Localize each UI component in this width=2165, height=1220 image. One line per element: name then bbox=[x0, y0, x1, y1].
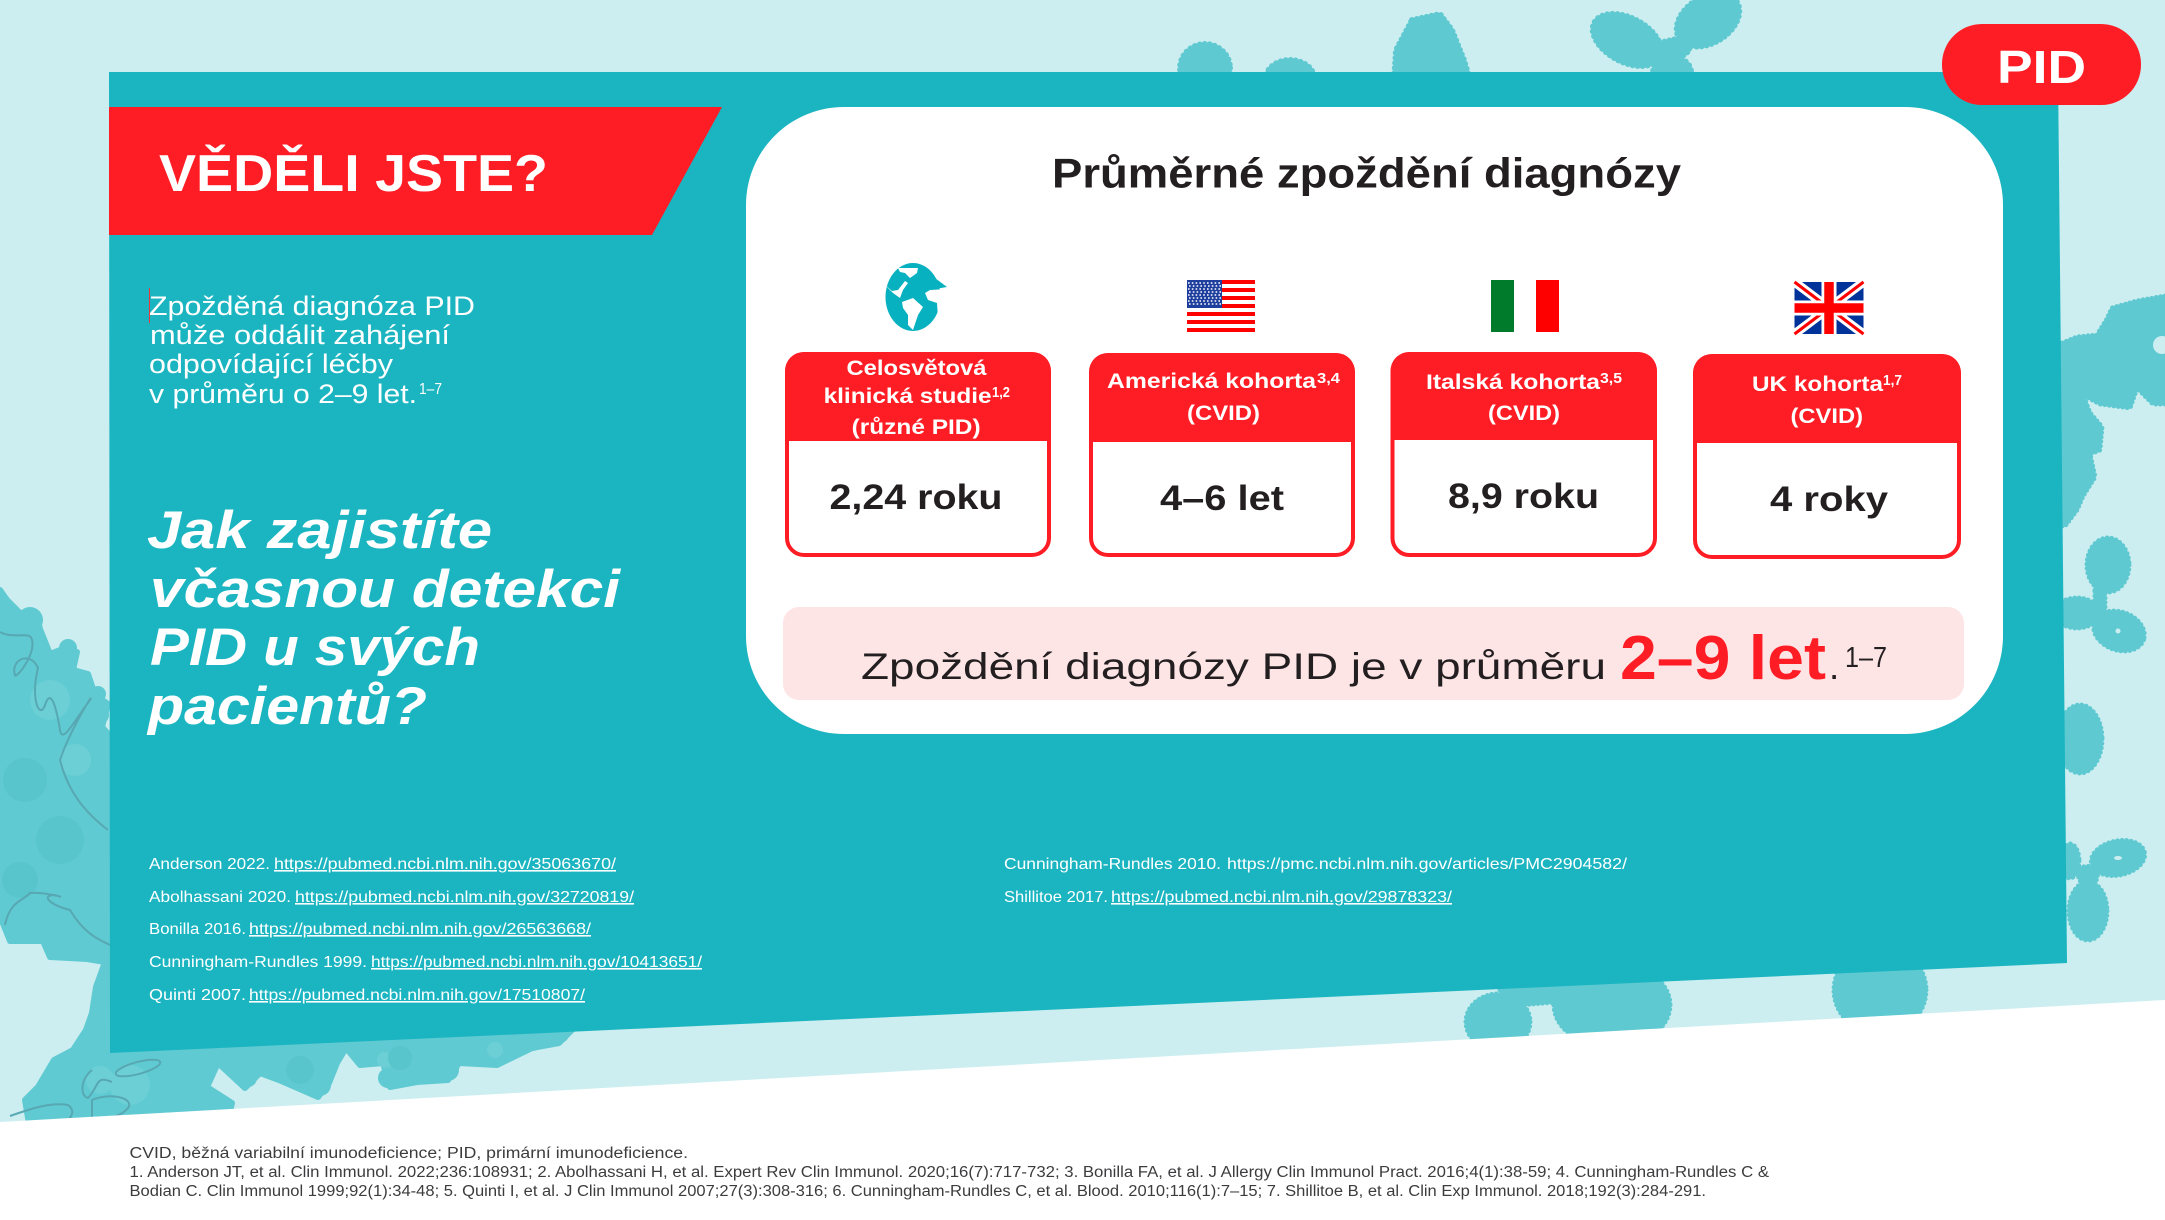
callout: average delay summary bbox=[783, 607, 1964, 700]
callout: average delay summary: 2–9 let bbox=[1620, 624, 1826, 693]
panel: average diagnostic delay card bbox=[746, 107, 2003, 734]
cohort card: USA: (CVID) bbox=[1187, 402, 1260, 425]
illustration: protein and antibodies along the right edge bbox=[2040, 296, 2165, 940]
illustration: protein clusters on the left edge bbox=[0, 590, 572, 1124]
cohort card: worldwide bbox=[785, 352, 1051, 555]
footnotes: Bodian C. Clin Immunol 1999;92(1):34-48; 5. Quinti I, et al. J Clin Immunol 2007;27(3):308-316; 6. Cunningham-Rundles C, et al. Blood. 2010;116(1):7–15; 7. Shillitoe B, et al. Clin Exp Immunol. 2018;192(3):284-291. bbox=[130, 1183, 1706, 1200]
footnotes bbox=[130, 1145, 1770, 1200]
reference links: right column: https://pubmed.ncbi.nlm.nih.gov/29878323/ bbox=[1111, 889, 1453, 906]
reference links: left column: https://pubmed.ncbi.nlm.nih.gov/35063670/ bbox=[274, 856, 617, 873]
text block: delayed diagnosis intro: Zpožděná diagnóza PID bbox=[149, 291, 475, 321]
reference links: left column: Cunningham-Rundles 1999. bbox=[149, 954, 367, 971]
cohort card: UK: UK kohorta bbox=[1752, 373, 1883, 396]
cohort card: UK: 1,7 bbox=[1883, 372, 1902, 389]
reference links: right column bbox=[1004, 856, 1628, 906]
cohort card: UK: (CVID) bbox=[1790, 405, 1863, 428]
cohort card: USA: 3,4 bbox=[1317, 370, 1341, 387]
reference links: right column: https://pmc.ncbi.nlm.nih.gov/articles/PMC2904582/ bbox=[1227, 856, 1628, 873]
illustration: antibodies along the top edge bbox=[1180, 0, 1749, 96]
cohort card: Italy: 3,5 bbox=[1600, 370, 1622, 387]
text block: delayed diagnosis intro: 1–7 bbox=[419, 381, 442, 398]
reference links: left column: https://pubmed.ncbi.nlm.nih.gov/32720819/ bbox=[295, 889, 635, 906]
reference links: left column: Quinti 2007. bbox=[149, 987, 246, 1004]
cohort card: UK bbox=[1693, 354, 1961, 557]
cohort card: Italy: Italská kohorta bbox=[1426, 371, 1600, 394]
question heading bbox=[146, 501, 621, 736]
badge: PID pill: PID bbox=[1997, 41, 2086, 93]
question heading: PID u svých bbox=[150, 618, 480, 677]
reference links: left column: Abolhassani 2020. bbox=[149, 889, 291, 906]
badge: PID pill bbox=[1942, 24, 2141, 105]
reference links: left column: https://pubmed.ncbi.nlm.nih.gov/10413651/ bbox=[371, 954, 703, 971]
reference links: right column: Cunningham-Rundles 2010. bbox=[1004, 856, 1221, 873]
reference links: right column: Shillitoe 2017. bbox=[1004, 889, 1108, 906]
question heading: pacientů? bbox=[146, 677, 427, 736]
text block: delayed diagnosis intro: v průměru o 2–9 let. bbox=[149, 379, 417, 409]
cohort card: Italy: 8,9 roku bbox=[1448, 477, 1599, 516]
cohort card: worldwide: 1,2 bbox=[992, 384, 1010, 401]
icon: US flag bbox=[1187, 280, 1255, 332]
illustration: antibodies along the bottom edge bbox=[1466, 946, 1926, 1050]
text block: delayed diagnosis intro bbox=[149, 288, 475, 409]
text block: delayed diagnosis intro: odpovídající léčby bbox=[149, 349, 394, 379]
reference links: left column: Anderson 2022. bbox=[149, 856, 270, 873]
reference links: left column bbox=[149, 856, 703, 1004]
cohort card: UK: 4 roky bbox=[1770, 480, 1889, 519]
text block: delayed diagnosis intro: může oddálit zahájení bbox=[150, 320, 451, 350]
reference links: left column: Bonilla 2016. bbox=[149, 921, 246, 938]
banner: did you know bbox=[109, 107, 722, 235]
cohort card: worldwide: Celosvětová bbox=[846, 357, 987, 380]
icon: globe bbox=[884, 263, 950, 335]
reference links: left column: https://pubmed.ncbi.nlm.nih.gov/17510807/ bbox=[249, 987, 586, 1004]
card heading: Průměrné zpoždění diagnózy bbox=[1052, 150, 1682, 196]
banner: did you know: VĚDĚLI JSTE? bbox=[159, 144, 548, 203]
footnotes: 1. Anderson JT, et al. Clin Immunol. 2022;236:108931; 2. Abolhassani H, et al. Expert Rev Clin Immunol. 2020;16(7):717-732; 3. Bonilla FA, et al. J Allergy Clin Immunol Pract. 2016;4(1):38-59; 4. Cunningham-Rundles C & bbox=[130, 1164, 1770, 1181]
question heading: včasnou detekci bbox=[150, 560, 621, 619]
white footer wedge bbox=[0, 1000, 2165, 1220]
icon: UK flag bbox=[1794, 282, 1864, 334]
icon: Italian flag bbox=[1491, 280, 1559, 332]
footnotes: CVID, běžná variabilní imunodeficience; PID, primární imunodeficience. bbox=[130, 1145, 688, 1162]
cohort card: worldwide: 2,24 roku bbox=[830, 478, 1002, 517]
question heading: Jak zajistíte bbox=[147, 501, 492, 560]
cohort card: USA: 4–6 let bbox=[1160, 479, 1284, 518]
panel: teal content panel bbox=[109, 72, 2067, 1053]
cohort card: worldwide: (různé PID) bbox=[852, 416, 981, 439]
cohort card: USA bbox=[1089, 353, 1355, 555]
callout: average delay summary: . bbox=[1829, 646, 1839, 687]
callout: average delay summary: 1–7 bbox=[1845, 642, 1887, 674]
cohort card: Italy: (CVID) bbox=[1488, 402, 1560, 425]
cohort card: Italy bbox=[1390, 352, 1657, 555]
cohort card: worldwide: klinická studie bbox=[824, 385, 992, 408]
cohort card: USA: Americká kohorta bbox=[1107, 370, 1316, 393]
reference links: left column: https://pubmed.ncbi.nlm.nih.gov/26563668/ bbox=[249, 921, 592, 938]
callout: average delay summary: Zpoždění diagnózy PID je v průměru bbox=[861, 646, 1606, 687]
